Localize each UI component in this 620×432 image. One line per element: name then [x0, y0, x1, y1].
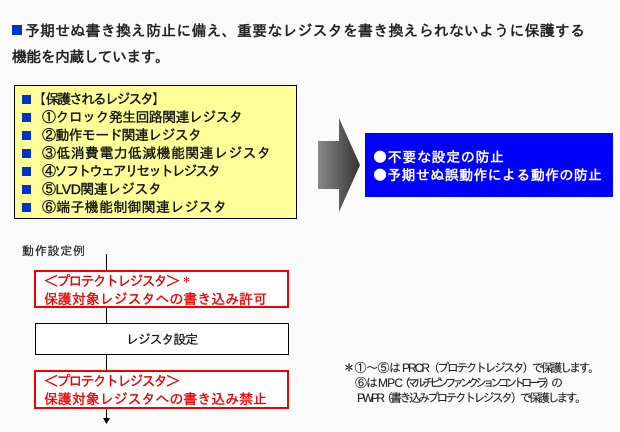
heading [12, 23, 585, 66]
flowchart step: protect on: 保護対象レジスタへの書き込み禁止 [44, 391, 267, 407]
flowchart: connector arrow [103, 254, 110, 424]
flowchart step: protect on [35, 371, 288, 408]
panel: protected registers [14, 86, 296, 218]
flowchart step: register setting: レジスタ設定 [126, 332, 198, 347]
footnote: （プロテクトレジスタ）で保護します。 [428, 361, 600, 375]
flowchart step: register setting [36, 324, 288, 354]
heading: 予期せぬ書き換え防止に備え、重要なレジスタを書き換えられないように保護する [25, 23, 585, 40]
footnote: PRCR [402, 361, 430, 375]
footnote: （マルチピンファンクションコントローラ）の [399, 376, 563, 390]
list item 2: ②動作モード関連レジスタ [42, 127, 202, 143]
flowchart step: protect on: ＜プロテクトレジスタ＞ [44, 373, 180, 389]
footnote: MPC [378, 376, 403, 390]
flowchart step: protect off [35, 271, 288, 307]
heading: 機能を内蔵しています。 [12, 49, 170, 66]
footnote [343, 361, 600, 405]
footnote: ＊①～⑤は [343, 361, 401, 375]
list item 4: ④ソフトウェアリセットレジスタ [42, 163, 221, 179]
panel: prevention outcomes: ●予期せぬ誤動作による動作の防止 [373, 168, 602, 182]
footnote: （書き込みプロテクトレジスタ）で保護します。 [381, 391, 587, 405]
flowchart label: 動作設定例 [22, 244, 85, 258]
list item 1: ①クロック発生回路関連レジスタ [42, 109, 243, 125]
footnote: ⑥は [355, 376, 378, 390]
list item 5: ⑤LVD関連レジスタ [42, 181, 162, 197]
arrow: result [318, 118, 360, 212]
list heading: 【 保護されるレジスタ】 [32, 91, 166, 107]
panel: prevention outcomes [365, 133, 613, 197]
list item 3: ③低消費電力低減機能関連レジスタ [42, 145, 271, 161]
footnote: PWPR [357, 391, 385, 405]
flowchart step: protect off: ＜プロテクトレジスタ＞ [44, 273, 180, 289]
flowchart step: protect off: 保護対象レジスタへの書き込み許可 [44, 291, 267, 307]
list item 6: ⑥端子機能制御関連レジスタ [42, 199, 227, 215]
flowchart step: protect off: ＊ [182, 275, 191, 285]
panel: prevention outcomes: ●不要な設定の防止 [373, 150, 504, 164]
